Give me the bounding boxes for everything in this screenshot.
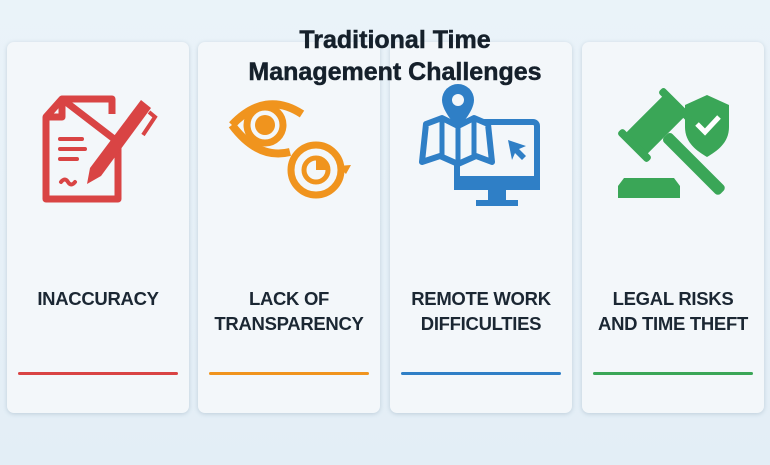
icon: eye with clock: [228, 100, 351, 198]
label: DIFFICULTIES: [421, 313, 541, 334]
icon: document with pen: [42, 96, 158, 202]
panel: inaccuracy: [7, 42, 189, 413]
icon: map and monitor: [419, 84, 540, 206]
label: LEGAL RISKS: [613, 288, 733, 309]
panel: transparency: [198, 42, 380, 413]
label: INACCURACY: [37, 288, 159, 309]
label: REMOTE WORK: [411, 288, 551, 309]
label: LACK OF: [249, 288, 329, 309]
title: [248, 26, 542, 86]
label: TRANSPARENCY: [214, 313, 364, 334]
label: [598, 288, 748, 334]
label: [411, 288, 551, 334]
label: AND TIME THEFT: [598, 313, 748, 334]
icon: gavel and shield: [618, 88, 729, 198]
panel: remote work: [390, 42, 572, 413]
title: Traditional Time: [299, 26, 491, 54]
panel: legal risks: [582, 42, 764, 413]
title: Management Challenges: [248, 58, 542, 86]
label: [214, 288, 364, 334]
